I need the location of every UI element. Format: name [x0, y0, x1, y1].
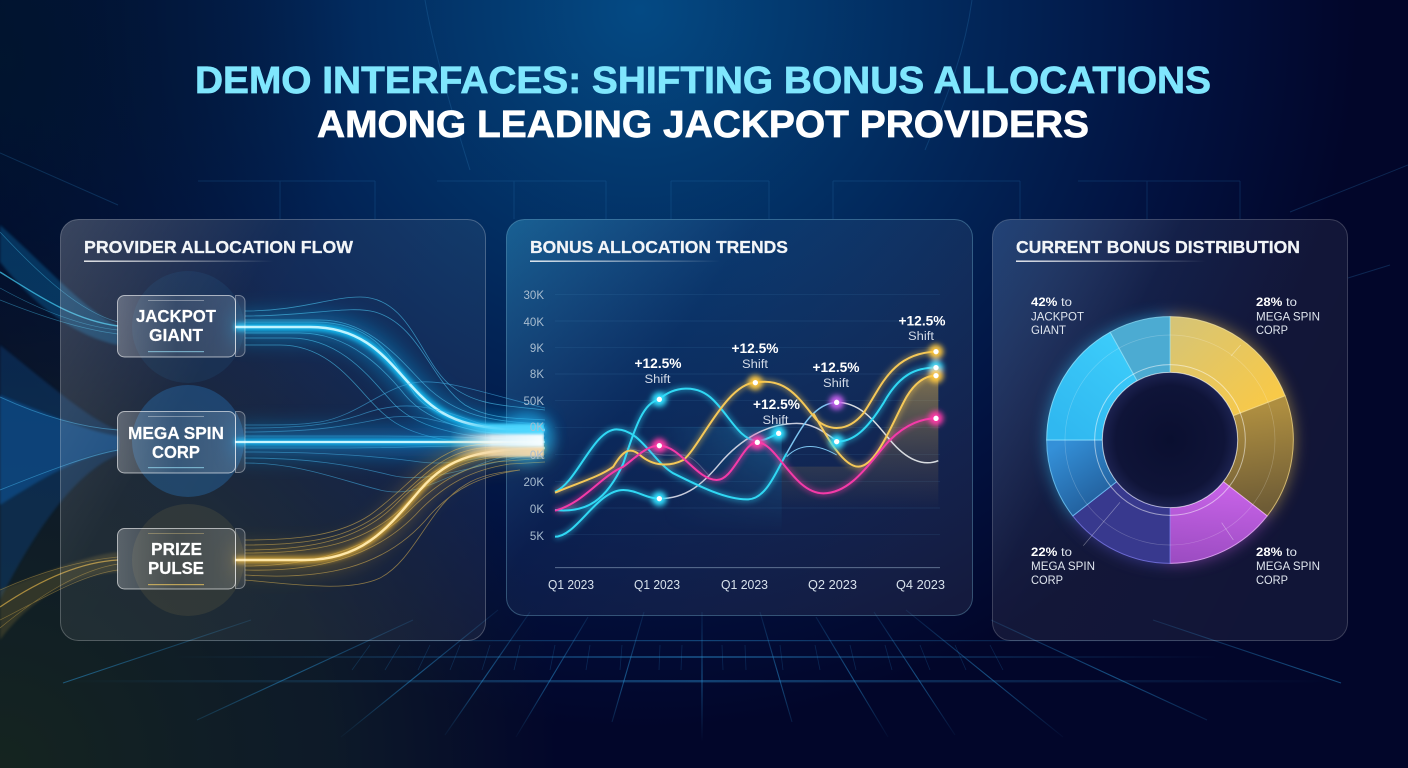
label: 42% to jackpot giant: 42% to	[1031, 297, 1072, 309]
label: 28% to mega spin corp top: CORP	[1256, 325, 1288, 337]
provider box: mega spin corp	[118, 412, 245, 473]
provider box: mega spin corp: MEGA SPIN	[128, 423, 224, 443]
label: 22% to mega spin corp: CORP	[1031, 575, 1063, 587]
x axis labels: Q1 2023	[721, 577, 768, 592]
label: 28% to mega spin corp top: MEGA SPIN	[1256, 312, 1320, 324]
donut glow	[1047, 317, 1293, 563]
title: DEMO INTERFACES: SHIFTING BONUS ALLOCATIONS	[195, 60, 1211, 102]
callouts: +12.5% shift: Shift	[823, 378, 850, 390]
provider box: prize pulse	[118, 528, 245, 589]
y axis labels: 40K	[524, 317, 544, 329]
heading: provider allocation flow: PROVIDER ALLOCATION FLOW	[84, 237, 353, 257]
label: 22% to mega spin corp: 22% to	[1031, 547, 1072, 559]
title: AMONG LEADING JACKPOT PROVIDERS	[317, 104, 1089, 146]
x axis labels	[548, 577, 945, 592]
callouts: +12.5% shift: +12.5%	[812, 359, 860, 375]
label: 42% to jackpot giant	[1031, 297, 1084, 337]
provider halo circles	[132, 271, 244, 616]
callouts: +12.5% shift: +12.5%	[634, 355, 682, 371]
provider box: jackpot giant: JACKPOT	[136, 306, 216, 326]
y axis labels: 20K	[524, 477, 544, 489]
segment: blue	[1047, 440, 1117, 516]
label: 28% to mega spin corp bottom: CORP	[1256, 575, 1288, 587]
callouts: +12.5% shift: +12.5%	[732, 340, 779, 356]
incoming light streams on the left edge	[0, 225, 118, 640]
callouts: +12.5% shift: Shift	[762, 415, 789, 427]
provider box: jackpot giant	[118, 296, 245, 357]
white and pale lines	[659, 423, 840, 499]
callouts: +12.5% shift: +12.5%	[898, 312, 946, 328]
panel: provider allocation flow	[60, 220, 486, 640]
donut chart: current bonus distribution	[1031, 297, 1320, 587]
label: 42% to jackpot giant: JACKPOT	[1031, 312, 1084, 324]
callouts: +12.5% shift: Shift	[644, 374, 671, 386]
y axis labels: 0K	[530, 422, 544, 434]
line chart: bonus allocation trends	[524, 290, 946, 592]
x axis labels: Q1 2023	[548, 577, 594, 592]
gold lines	[555, 352, 936, 493]
y axis labels	[524, 290, 544, 543]
donut rings and ticks	[1065, 335, 1275, 546]
x axis labels: Q4 2023	[896, 577, 945, 592]
provider box: mega spin corp: CORP	[152, 442, 200, 462]
y axis labels: 0K	[530, 504, 544, 516]
callouts: +12.5% shift: Shift	[742, 359, 769, 371]
plot lines	[555, 295, 943, 568]
label: 28% to mega spin corp bottom: MEGA SPIN	[1256, 561, 1320, 573]
magenta line	[555, 418, 936, 511]
cyan lines	[555, 429, 787, 499]
label: 22% to mega spin corp	[1031, 547, 1095, 587]
y axis labels: 8K	[530, 369, 544, 381]
y axis labels: 0K	[530, 450, 544, 462]
provider box: prize pulse: PULSE	[148, 558, 204, 578]
callouts: +12.5% shift	[634, 312, 946, 427]
x axis labels: Q1 2023	[634, 577, 680, 592]
segment: muted cyan	[1110, 317, 1170, 381]
title	[195, 60, 1211, 146]
x axis labels: Q2 2023	[808, 577, 857, 592]
flow stream: prize pulse	[235, 440, 545, 586]
segment: bright cyan	[1047, 332, 1137, 440]
label: 28% to mega spin corp bottom: 28% to	[1256, 547, 1297, 559]
heading: bonus allocation trends: BONUS ALLOCATION TRENDS	[530, 237, 788, 257]
glow layer	[555, 352, 936, 537]
segment: dark gold	[1223, 396, 1293, 516]
label: 42% to jackpot giant: GIANT	[1031, 325, 1066, 337]
provider box: prize pulse: PRIZE	[151, 539, 202, 559]
segment: purple	[1170, 482, 1267, 563]
y axis labels: 9K	[530, 343, 544, 355]
label: 22% to mega spin corp: MEGA SPIN	[1031, 561, 1095, 573]
label: 28% to mega spin corp top: 28% to	[1256, 297, 1297, 309]
panel: bonus allocation trends	[506, 220, 972, 616]
provider box: jackpot giant: GIANT	[149, 325, 203, 345]
heading: current bonus distribution: CURRENT BONUS DISTRIBUTION	[1016, 237, 1300, 257]
label: 28% to mega spin corp bottom	[1256, 547, 1320, 587]
y axis labels: 5K	[530, 531, 544, 543]
flow stream: mega spin corp	[235, 382, 545, 492]
donut hole	[1102, 372, 1238, 508]
segment: gold top	[1170, 317, 1285, 416]
y axis labels: 30K	[524, 290, 544, 302]
flow stream: jackpot giant	[235, 297, 545, 445]
label: 28% to mega spin corp top	[1256, 297, 1320, 337]
callouts: +12.5% shift: Shift	[908, 331, 935, 343]
flow convergence glow	[450, 412, 554, 464]
panel: current bonus distribution	[992, 220, 1348, 640]
segment: indigo	[1073, 482, 1170, 563]
data point markers	[652, 344, 943, 506]
callouts: +12.5% shift: +12.5%	[753, 396, 801, 412]
y axis labels: 50K	[524, 396, 544, 408]
